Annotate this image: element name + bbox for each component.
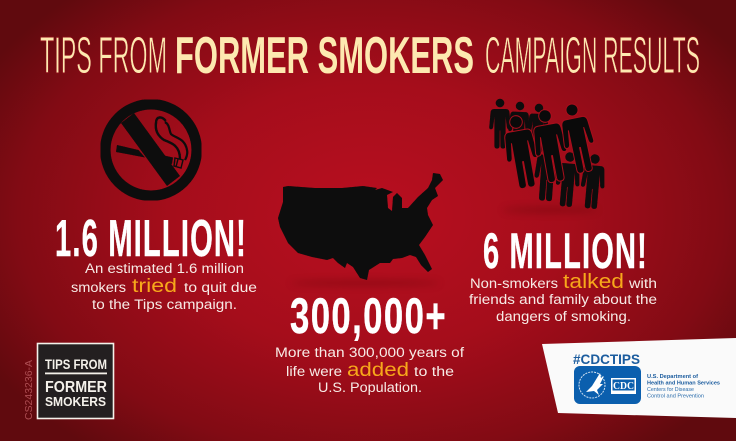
icon: map of the United States [278,173,443,286]
stat: 6 million: Non-smokers [470,276,558,291]
hashtag: #CDCTIPS [573,351,640,367]
department text: Control and Prevention [647,394,704,400]
logo: CDC: CDC [613,381,634,392]
stat: 6 million [469,223,657,324]
title: TIPS FROM [40,27,167,85]
icon: group of people [489,99,607,212]
department text [647,374,720,400]
stat: 6 million: friends and family about the [469,292,657,307]
stat: 300,000+: More than 300,000 years of [275,345,464,360]
stat: 6 million: talked [563,271,624,293]
stat: 300,000+: life were [286,364,342,379]
logo: Tips From Former Smokers [38,344,114,418]
department text: Health and Human Services [647,380,720,386]
logo: CDC [574,366,641,404]
stat: 6 million: dangers of smoking. [496,309,631,324]
department text: Centers for Disease [647,387,694,393]
stat: 300,000+: U.S. Population. [318,380,422,395]
stat: 300,000+: 300,000+ [290,288,447,344]
panel: CDC [542,338,736,418]
logo: Tips From Former Smokers: TIPS FROM [45,357,107,372]
stat: 300,000+: added [347,360,409,381]
logo: Tips From Former Smokers: FORMER [45,379,107,396]
stat: 300,000+ [275,288,464,395]
stat: 300,000+: to the [414,364,454,379]
stat: 1.6 million: to the Tips campaign. [92,297,237,312]
stat: 1.6 million [55,210,257,312]
publication code: CS243236-A [23,360,35,420]
icon: no smoking sign [105,104,197,196]
stat: 1.6 million: to quit due [184,280,257,295]
stat: 6 million: with [628,276,657,291]
department text: U.S. Department of [647,374,698,380]
stat: 1.6 million: smokers [71,280,126,295]
stat: 1.6 million: tried [132,276,177,297]
stat: 1.6 million: An estimated 1.6 million [85,261,244,276]
logo: Tips From Former Smokers: SMOKERS [45,394,106,409]
title: FORMER SMOKERS [175,27,474,85]
stat: 1.6 million: 1.6 MILLION! [55,210,247,268]
